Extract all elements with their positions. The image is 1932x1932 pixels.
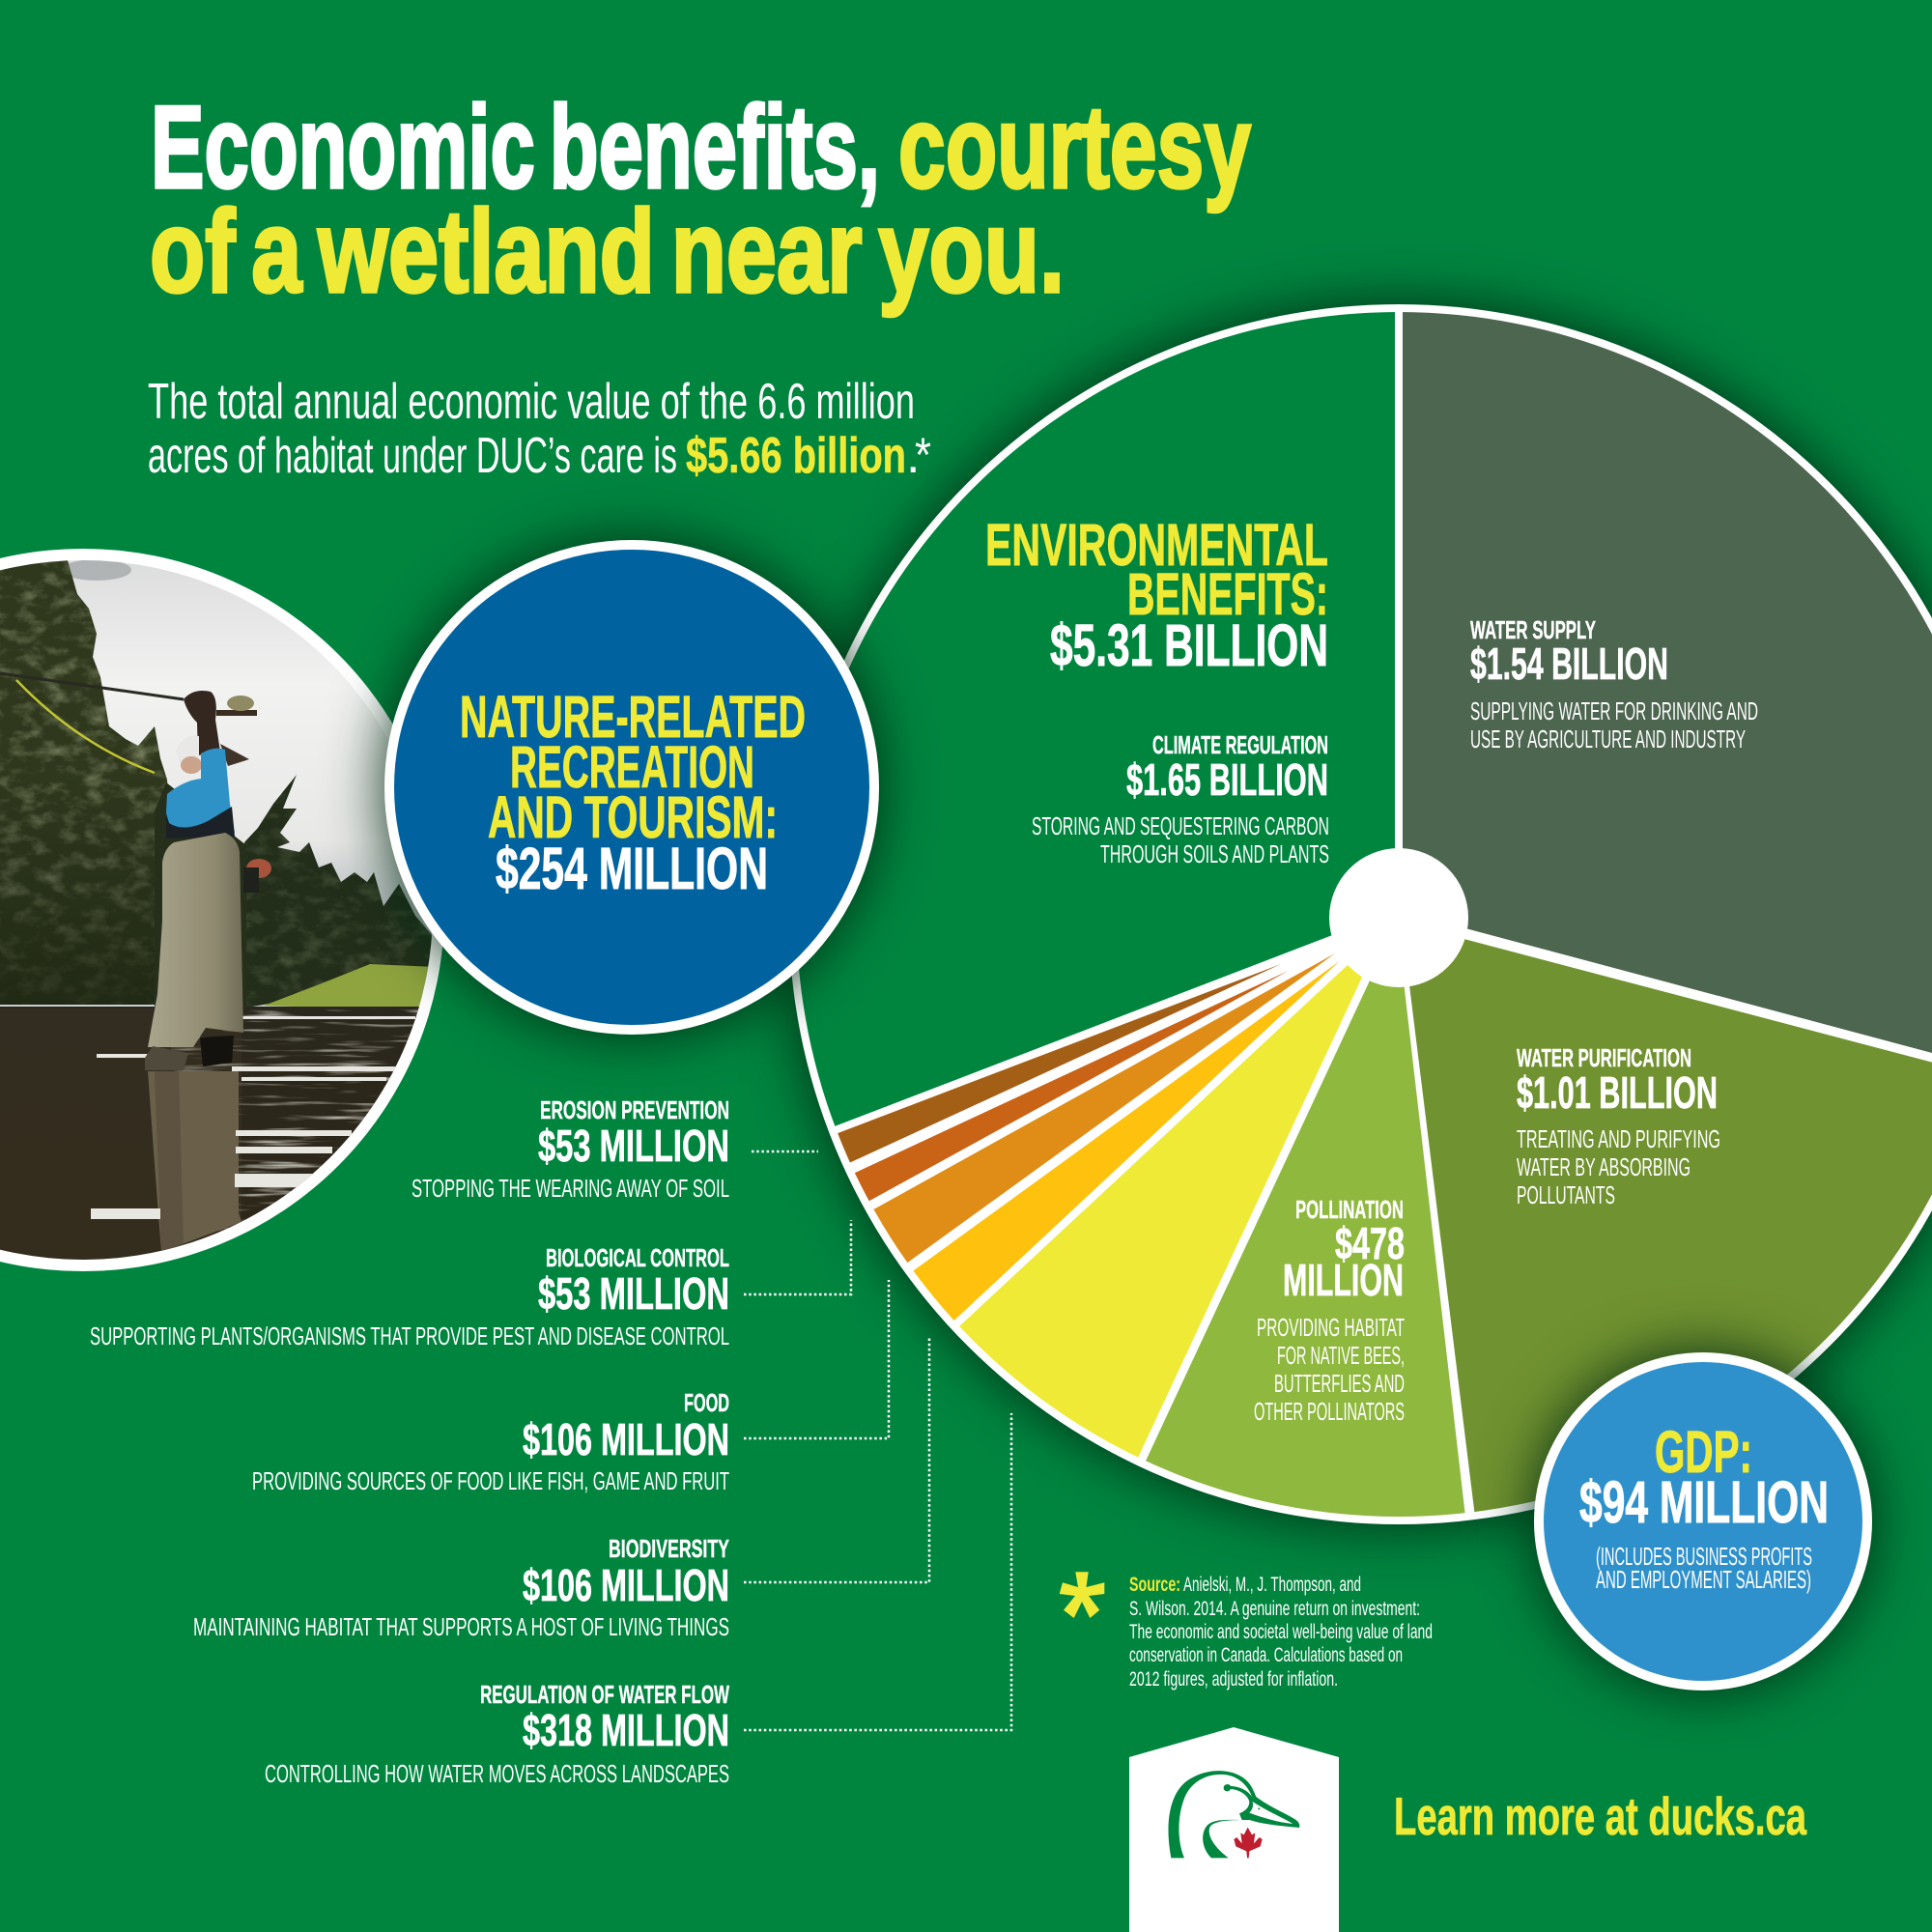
pie hub <box>1329 848 1468 987</box>
icon: source asterisk <box>1060 1572 1104 1618</box>
title <box>150 81 1251 317</box>
slice: erosion prevention <box>838 964 1281 1163</box>
label: climate regulation: THROUGH SOILS AND PLANTS <box>1100 839 1329 868</box>
label: pollination: MILLION <box>1283 1255 1404 1305</box>
source note: The economic and societal well-being value of land <box>1129 1621 1433 1643</box>
callout circle: nature-related recreation and tourism: RECREATION <box>510 734 754 800</box>
slice: environmental green (climate regulation) <box>799 312 1395 1126</box>
label: climate regulation: $1.65 BILLION <box>1126 754 1328 805</box>
label: water purification: WATER BY ABSORBING <box>1517 1152 1690 1181</box>
label: pollination: OTHER POLLINATORS <box>1254 1397 1405 1426</box>
label: water purification: POLLUTANTS <box>1517 1180 1615 1209</box>
label: pollination: PROVIDING HABITAT <box>1257 1313 1405 1342</box>
label: pollination: $478 <box>1335 1218 1405 1268</box>
callout circle: nature-related recreation and tourism: $254 MILLION <box>496 836 768 901</box>
label: biological control: BIOLOGICAL CONTROL <box>546 1243 729 1272</box>
label: pollination: BUTTERFLIES AND <box>1274 1369 1405 1398</box>
label: climate regulation <box>1032 730 1329 868</box>
heading: environmental benefits <box>985 512 1328 678</box>
label: biological control: SUPPORTING PLANTS/ORGANISMS THAT PROVIDE PEST AND DISEASE CONTROL <box>90 1321 729 1350</box>
label: regulation of water flow <box>265 1680 729 1788</box>
callout circle: GDP <box>1534 1352 1872 1690</box>
heading: environmental benefits: BENEFITS: <box>1127 561 1328 627</box>
label: regulation of water flow: CONTROLLING HOW WATER MOVES ACROSS LANDSCAPES <box>265 1759 729 1788</box>
intro text: The total annual economic value of the 6.6 million <box>148 374 915 430</box>
label: water purification: TREATING AND PURIFYING <box>1517 1124 1720 1153</box>
title: of a wetland near you. <box>150 185 1065 317</box>
label: biodiversity <box>193 1534 729 1641</box>
label: food: $106 MILLION <box>523 1414 729 1464</box>
source note: Anielski, M., J. Thompson, and <box>1183 1574 1361 1596</box>
intro text: . <box>906 428 920 484</box>
slice: water purification <box>1409 939 1932 1513</box>
source note: 2012 figures, adjusted for inflation. <box>1129 1668 1338 1690</box>
pie chart: total annual economic value <box>763 269 1932 1560</box>
label: climate regulation: STORING AND SEQUESTERING CARBON <box>1032 811 1329 840</box>
label: food <box>252 1388 729 1495</box>
label: erosion prevention <box>412 1095 729 1203</box>
callout circle: nature-related recreation and tourism: AND TOURISM: <box>488 784 778 850</box>
label: erosion prevention: $53 MILLION <box>538 1121 729 1171</box>
label: water supply: $1.54 BILLION <box>1470 639 1668 689</box>
intro text <box>148 374 931 484</box>
callout circle: GDP: $94 MILLION <box>1579 1469 1829 1535</box>
label: pollination <box>1254 1195 1405 1426</box>
dotted leader lines <box>744 1151 1011 1730</box>
source note: S. Wilson. 2014. A genuine return on investment: <box>1129 1598 1420 1620</box>
label: regulation of water flow: $318 MILLION <box>523 1705 729 1755</box>
photo: fly fisher in a wetland <box>0 549 442 1271</box>
callout circle: nature-related recreation and tourism <box>384 540 879 1035</box>
slice: biological control <box>854 971 1289 1202</box>
label: climate regulation: CLIMATE REGULATION <box>1152 730 1328 759</box>
callout circle: nature-related recreation and tourism: NATURE-RELATED <box>460 684 806 750</box>
label: regulation of water flow: REGULATION OF WATER FLOW <box>480 1680 729 1709</box>
label: water purification: WATER PURIFICATION <box>1517 1043 1691 1072</box>
label: water supply: USE BY AGRICULTURE AND INDUSTRY <box>1470 724 1746 753</box>
intro text: $5.66 billion <box>686 428 906 484</box>
source note <box>1129 1574 1433 1690</box>
slice: pollination <box>1146 980 1464 1517</box>
label: food: FOOD <box>684 1388 729 1417</box>
label: biodiversity: BIODIVERSITY <box>609 1534 729 1563</box>
label: erosion prevention: STOPPING THE WEARING AWAY OF SOIL <box>412 1174 729 1203</box>
label: biological control: $53 MILLION <box>538 1268 729 1319</box>
label: water supply: WATER SUPPLY <box>1470 615 1596 644</box>
slice: biodiversity <box>914 960 1340 1321</box>
label: pollination: POLLINATION <box>1295 1195 1404 1224</box>
label: biodiversity: $106 MILLION <box>523 1560 729 1610</box>
label: water purification: $1.01 BILLION <box>1517 1067 1718 1118</box>
slice: water supply <box>1403 312 1932 1053</box>
label: biodiversity: MAINTAINING HABITAT THAT SUPPORTS A HOST OF LIVING THINGS <box>193 1612 729 1641</box>
label: water purification <box>1517 1043 1720 1209</box>
title: Economic benefits, <box>151 81 880 213</box>
title: courtesy <box>898 81 1251 213</box>
slice: regulation of water flow <box>959 965 1362 1458</box>
label: water supply <box>1470 615 1758 753</box>
source note: Source: <box>1129 1574 1180 1596</box>
label: erosion prevention: EROSION PREVENTION <box>540 1095 729 1124</box>
label: pollination: FOR NATIVE BEES, <box>1277 1341 1405 1370</box>
heading: environmental benefits: $5.31 BILLION <box>1050 612 1328 678</box>
label: biological control <box>90 1243 729 1350</box>
source note: conservation in Canada. Calculations based on <box>1129 1644 1403 1666</box>
logo: Ducks Unlimited Canada shield <box>1129 1727 1339 1932</box>
intro text: acres of habitat under DUC’s care is <box>148 428 677 484</box>
slice: food <box>873 953 1335 1264</box>
callout circle: GDP: GDP: <box>1655 1419 1752 1485</box>
label: food: PROVIDING SOURCES OF FOOD LIKE FISH, GAME AND FRUIT <box>252 1466 729 1495</box>
intro text: * <box>915 428 931 482</box>
heading: environmental benefits: ENVIRONMENTAL <box>985 512 1328 578</box>
